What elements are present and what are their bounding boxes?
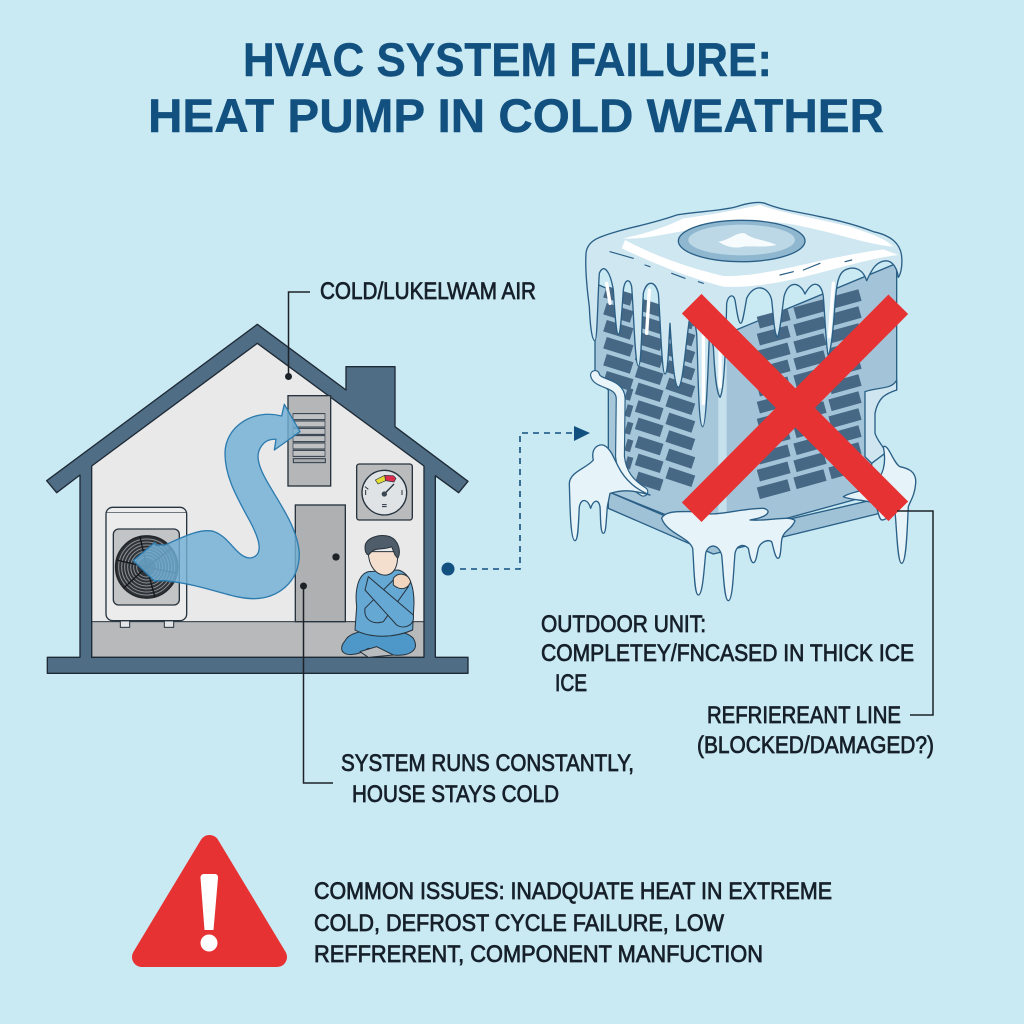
- red X mark: [692, 304, 898, 512]
- common issues text: COLD, DEFROST CYCLE FAILURE, LOW: [314, 910, 724, 937]
- callout: refrigerant line: [697, 511, 934, 759]
- common issues text: COMMON ISSUES: INADQUATE HEAT IN EXTREME: [314, 878, 832, 905]
- callout: outdoor unit: [541, 611, 914, 697]
- callout: refrigerant line: REFRIEREANT LINE: [707, 702, 901, 729]
- common issues text: [314, 878, 832, 968]
- arms: [365, 577, 408, 623]
- callout: system runs constantly: SYSTEM RUNS CONSTANTLY,: [341, 750, 634, 777]
- ice cap with icicles: [586, 202, 902, 427]
- left pipe ice: [595, 375, 643, 492]
- house illustration: [47, 324, 468, 673]
- ice highlights: [623, 205, 893, 247]
- thermostat gauge: [357, 464, 412, 520]
- callout: outdoor unit: ICE: [555, 670, 587, 697]
- title: HEAT PUMP IN COLD WEATHER: [148, 89, 884, 142]
- airflow arrow: [133, 404, 300, 599]
- house floor: [92, 622, 424, 657]
- shivering person: [342, 536, 415, 657]
- house interior wall: [92, 343, 424, 657]
- callout: outdoor unit: OUTDOOR UNIT:: [541, 611, 706, 638]
- house frame, roof and chimney: [47, 324, 468, 673]
- frozen outdoor unit: [569, 202, 916, 601]
- bottom front ice: [662, 508, 795, 601]
- bottom left ice: [569, 445, 650, 541]
- title: HVAC SYSTEM FAILURE:: [243, 33, 772, 86]
- left grille: [605, 292, 693, 485]
- unit left face: [595, 283, 720, 537]
- callout: cold air: [285, 278, 536, 380]
- torso: [355, 570, 414, 636]
- indoor heat pump unit: [106, 507, 187, 627]
- right side ice strip: [865, 380, 897, 463]
- common issues text: REFFRERENT, COMPONENT MANFUCTION: [314, 941, 763, 968]
- head: [368, 552, 398, 575]
- bottom right ice: [843, 446, 916, 563]
- unit right face: [720, 263, 897, 537]
- fan: [116, 536, 178, 598]
- callout: outdoor unit: COMPLETEY/FNCASED IN THICK ICE: [541, 640, 914, 667]
- callout: system runs constantly: [300, 582, 634, 808]
- callout: system runs constantly: HOUSE STAYS COLD: [352, 781, 559, 808]
- callout: refrigerant line: (BLOCKED/DAMAGED?): [697, 732, 934, 759]
- wall vent: [288, 396, 331, 486]
- legs: [342, 630, 415, 655]
- callout: cold air: COLD/LUKELWAM AIR: [320, 278, 536, 305]
- icon: warning triangle: [142, 845, 277, 957]
- door: [295, 505, 345, 622]
- title: [148, 33, 884, 142]
- right grille: [758, 295, 860, 493]
- dashed connector arrow: [442, 426, 590, 576]
- top fan ring: [678, 220, 805, 262]
- base plate: [608, 492, 887, 554]
